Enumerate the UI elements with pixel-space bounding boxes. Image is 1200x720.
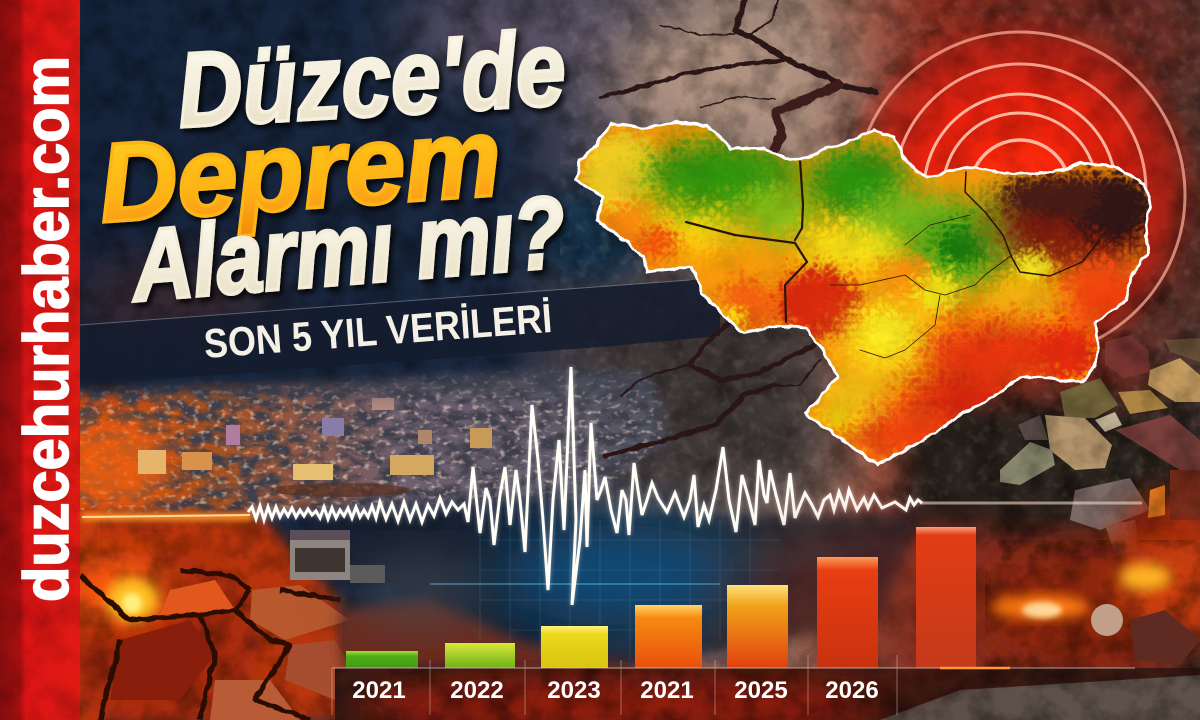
year labels: 2021	[640, 677, 694, 704]
bar 2022	[445, 643, 515, 668]
panel: bottom-right lava glows	[980, 540, 1200, 675]
heat colours	[575, 125, 1157, 455]
axis	[332, 655, 1135, 715]
map: Düzce risk heat map	[560, 110, 1160, 480]
bar glow	[730, 540, 990, 680]
subtitle: SON 5 YIL VERİLERİ	[202, 295, 554, 367]
title	[95, 9, 569, 323]
panel: subtitle band	[80, 278, 720, 385]
site name: duzcehurhaber.com	[12, 56, 82, 602]
internal district lines	[686, 160, 1100, 358]
bar 2027	[916, 527, 976, 668]
bar 2023	[541, 626, 608, 668]
bar 2024	[635, 605, 702, 668]
year labels	[352, 677, 879, 704]
bar 2026	[817, 557, 878, 668]
title line 3: Alarmı mı?	[125, 174, 569, 323]
panel: city skyline	[80, 363, 672, 519]
panel: rubble and rocks	[990, 330, 1200, 585]
year labels: 2021	[352, 677, 406, 704]
bar chart	[332, 527, 1135, 715]
year labels: 2022	[450, 677, 504, 704]
panel: lower-left lava ground	[40, 510, 350, 720]
panel: seismic rings	[845, 8, 1196, 342]
panel: bottom strip	[335, 668, 1200, 720]
title line 1: Düzce'de	[174, 9, 569, 150]
map outline	[576, 122, 1150, 465]
cracks in ground	[600, 0, 875, 455]
year labels: 2025	[734, 677, 788, 704]
year labels: 2026	[825, 677, 879, 704]
glowing baselines	[82, 503, 1142, 521]
panel: blue grid and ghost building	[290, 515, 920, 670]
year labels: 2023	[547, 677, 601, 704]
seismograph waveform	[248, 367, 922, 605]
bar 2021	[346, 651, 418, 668]
title line 2: Deprem	[95, 94, 505, 246]
side strip	[0, 0, 82, 720]
bar 2025	[727, 585, 788, 668]
